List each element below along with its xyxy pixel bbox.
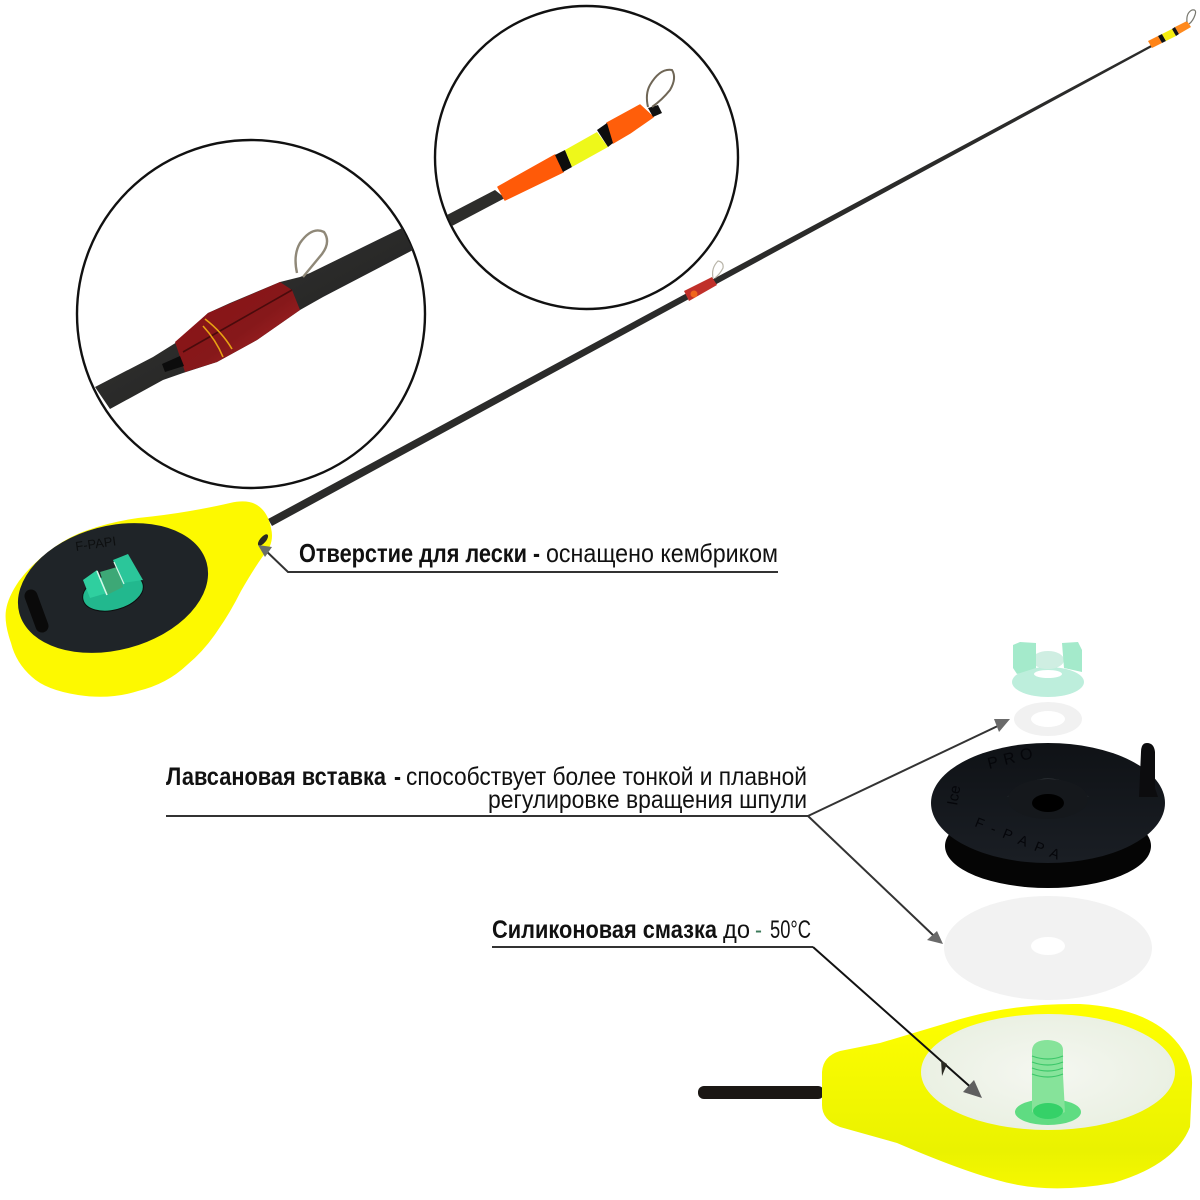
callout dash: - xyxy=(394,763,401,791)
arrow head xyxy=(258,545,272,557)
callout bold text: Силиконовая смазка xyxy=(492,916,718,944)
embossed logo text on disc: F-PAPI xyxy=(74,533,117,554)
callout bold text: Отверстие для лески xyxy=(299,538,527,568)
embossed text IK: Ice xyxy=(944,784,964,807)
green screw knob xyxy=(78,554,148,617)
callout temperature: 50°C xyxy=(770,916,811,944)
black spool disc xyxy=(3,503,223,673)
callout regular text: оснащено кембриком xyxy=(546,538,778,568)
callout leader line xyxy=(263,548,778,572)
callout text line one: способствует более тонкой и плавной xyxy=(406,763,807,791)
exploded part: large white washer xyxy=(944,896,1152,1000)
callout dash: - xyxy=(533,538,540,568)
arrow head xyxy=(963,1080,982,1098)
callout: silicone grease xyxy=(492,916,813,947)
bottom handle open view xyxy=(698,1004,1192,1188)
spool pin xyxy=(1139,743,1158,797)
rod tip section with wraps xyxy=(447,70,674,226)
arrow head small washer xyxy=(994,719,1010,732)
leader to large washer xyxy=(808,816,934,936)
magnified circle: red guide xyxy=(77,140,425,488)
green screw xyxy=(1015,1040,1081,1125)
callout: line hole xyxy=(258,538,778,572)
arrow head large washer xyxy=(927,931,943,944)
callout bold text: Лавсановая вставка xyxy=(166,763,387,791)
rod tip with orange and yellow wrap xyxy=(1148,10,1196,48)
embossed text PRO: PRO xyxy=(986,745,1035,773)
small red guide wrap on rod xyxy=(684,261,723,301)
small dark shadow mark xyxy=(941,1060,947,1076)
line hole xyxy=(256,533,270,547)
leader line xyxy=(166,815,808,817)
exploded part: small white washer xyxy=(1014,702,1082,736)
spool pin xyxy=(31,596,42,626)
embossed text brand: F-PAPA xyxy=(973,814,1063,863)
rod section with guide wrap xyxy=(95,228,413,409)
rear pin xyxy=(698,1086,824,1099)
grease arrow xyxy=(813,947,982,1098)
fishing rod blank xyxy=(268,45,1152,526)
yellow handle body xyxy=(6,501,272,697)
leader underline xyxy=(492,946,813,948)
exploded part: green screw cap xyxy=(1012,642,1084,697)
inner cup with grease xyxy=(921,1014,1175,1130)
exploded part: black spool xyxy=(931,743,1165,888)
callout: mylar insert xyxy=(166,719,1010,944)
callout regular text: до xyxy=(723,916,750,944)
leader to small washer xyxy=(808,724,1002,816)
top handle with spool xyxy=(3,501,272,697)
callout dash: - xyxy=(755,916,762,944)
callout text line two: регулировке вращения шпули xyxy=(488,786,807,814)
yellow handle body xyxy=(822,1004,1192,1188)
magnified circle: rod tip xyxy=(435,6,738,309)
